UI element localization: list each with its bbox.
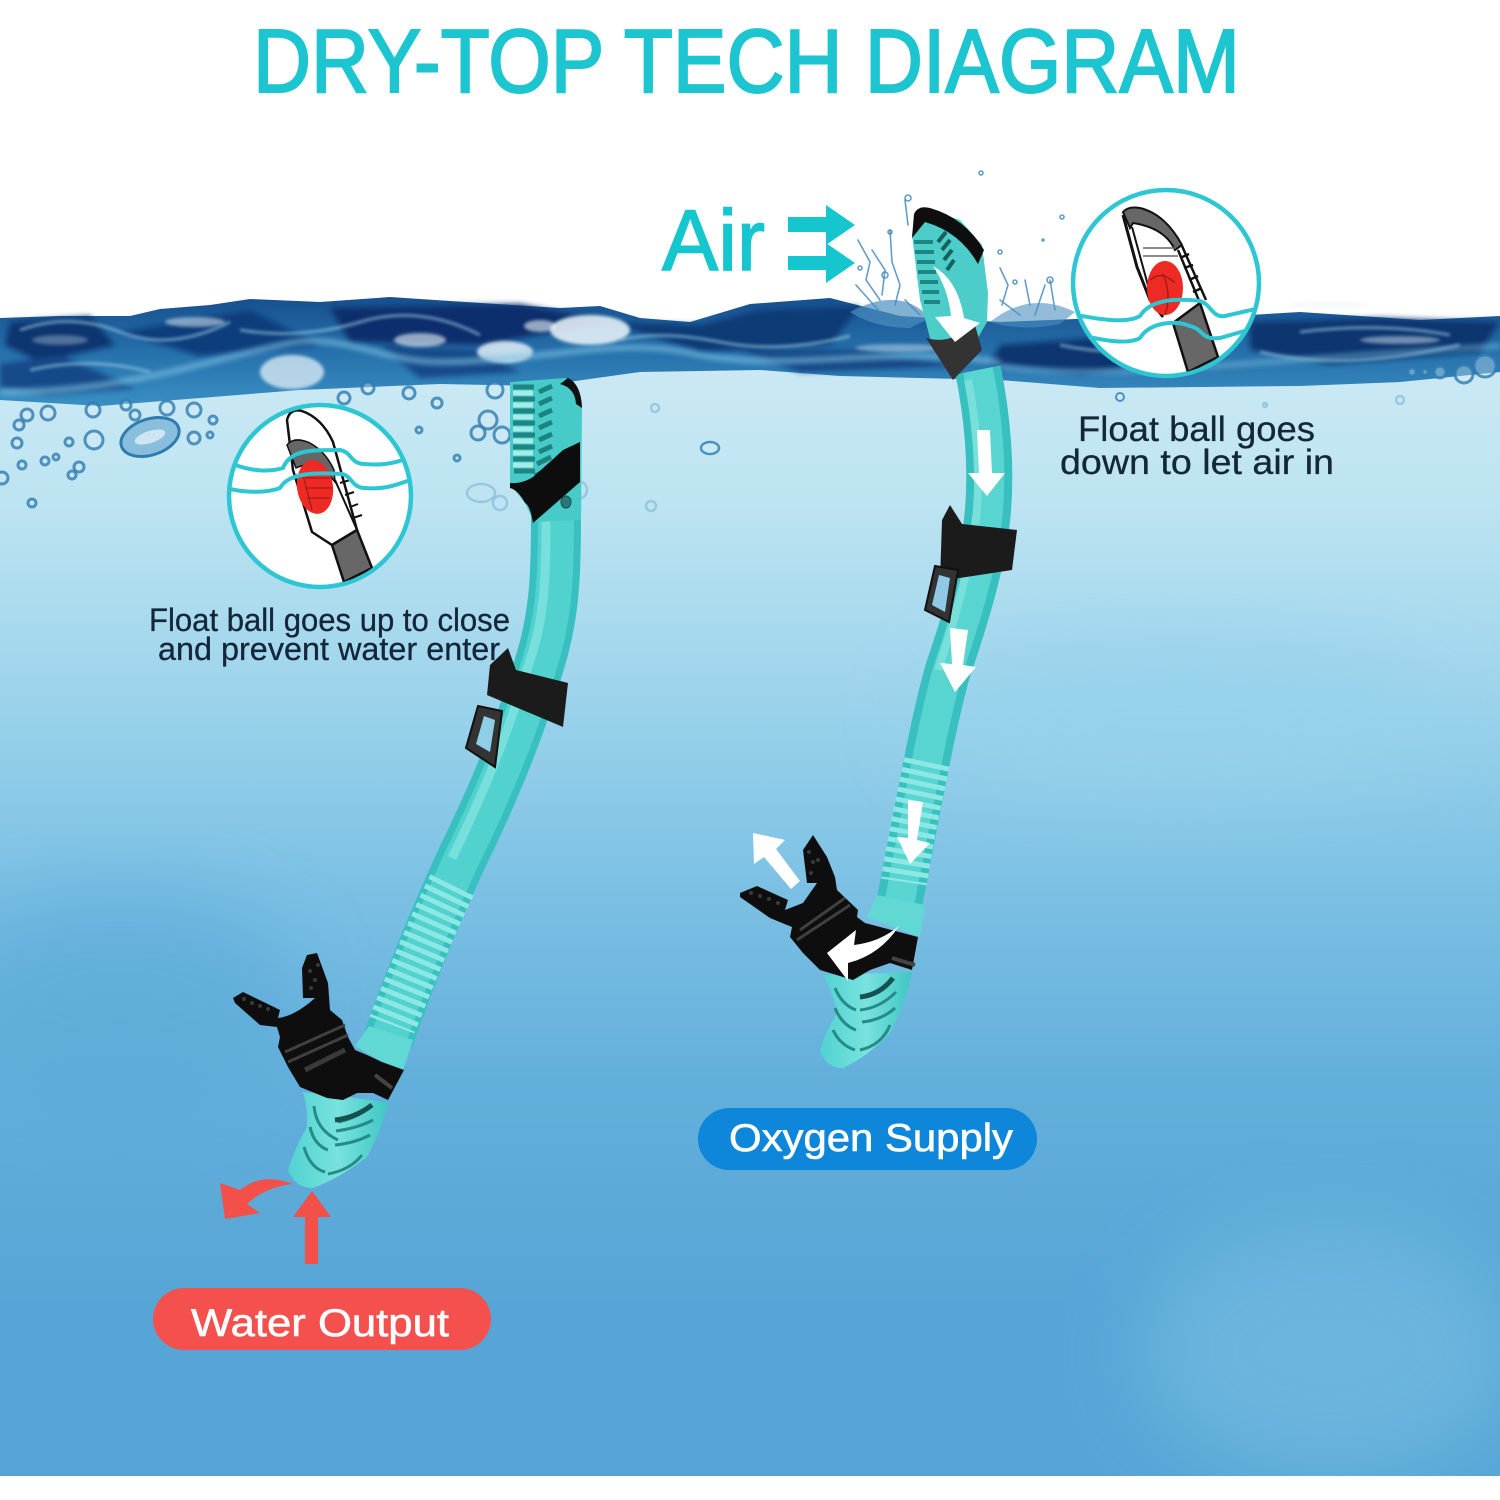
right snorkel tube collar bbox=[867, 895, 925, 937]
red arrow: water out straight bbox=[293, 1191, 331, 1264]
white arrow: to mouthpiece bbox=[753, 833, 800, 889]
text: float ball goes up: and prevent water enter bbox=[158, 631, 500, 667]
right snorkel: air intake state bbox=[740, 207, 1017, 1068]
left snorkel purge valve bbox=[288, 1092, 388, 1188]
left snorkel tube collar bbox=[355, 1026, 413, 1070]
left snorkel: water output state bbox=[233, 378, 582, 1188]
callout: float ball down bbox=[1072, 190, 1260, 376]
right snorkel mouthpiece bbox=[740, 835, 918, 980]
pill: water output: Water Output bbox=[191, 1302, 449, 1345]
right snorkel tube bbox=[867, 370, 989, 937]
air label: Air bbox=[662, 193, 765, 289]
splash around right snorkel top bbox=[850, 171, 1075, 328]
right snorkel purge valve bbox=[820, 972, 912, 1068]
text: float ball goes up: Float ball goes up to close bbox=[149, 602, 510, 638]
title: DRY-TOP TECH DIAGRAM bbox=[253, 12, 1240, 112]
pill: oxygen supply: Oxygen Supply bbox=[729, 1117, 1014, 1160]
left snorkel tube bbox=[355, 495, 556, 1070]
white arrow: down tube 1 bbox=[968, 430, 1005, 496]
callout: float ball up bbox=[226, 405, 415, 587]
text: float ball goes down: down to let air in bbox=[1060, 443, 1334, 482]
white arrow: air into head bbox=[933, 266, 980, 342]
right snorkel clip bbox=[925, 505, 1017, 622]
water surface waves bbox=[0, 297, 1500, 406]
text: float ball goes down bbox=[1060, 410, 1334, 482]
white arrow: down tube 3 bbox=[897, 800, 930, 864]
text: float ball goes down: Float ball goes bbox=[1078, 410, 1315, 449]
left snorkel dry-top head bbox=[510, 378, 582, 523]
red arrow: water out curved bbox=[220, 1179, 293, 1219]
right snorkel dry-top head bbox=[912, 207, 988, 380]
white arrow: curved in elbow bbox=[827, 926, 899, 981]
white arrow: down tube 2 bbox=[940, 628, 976, 692]
bubbles under the surface bbox=[0, 355, 1496, 511]
underwater background bbox=[0, 340, 1500, 1480]
text: float ball goes up bbox=[149, 602, 510, 667]
air arrows bbox=[788, 205, 855, 283]
left snorkel clip bbox=[466, 648, 568, 767]
pill: oxygen supply bbox=[698, 1108, 1037, 1170]
left snorkel mouthpiece bbox=[233, 953, 404, 1100]
pill: water output bbox=[153, 1288, 491, 1350]
